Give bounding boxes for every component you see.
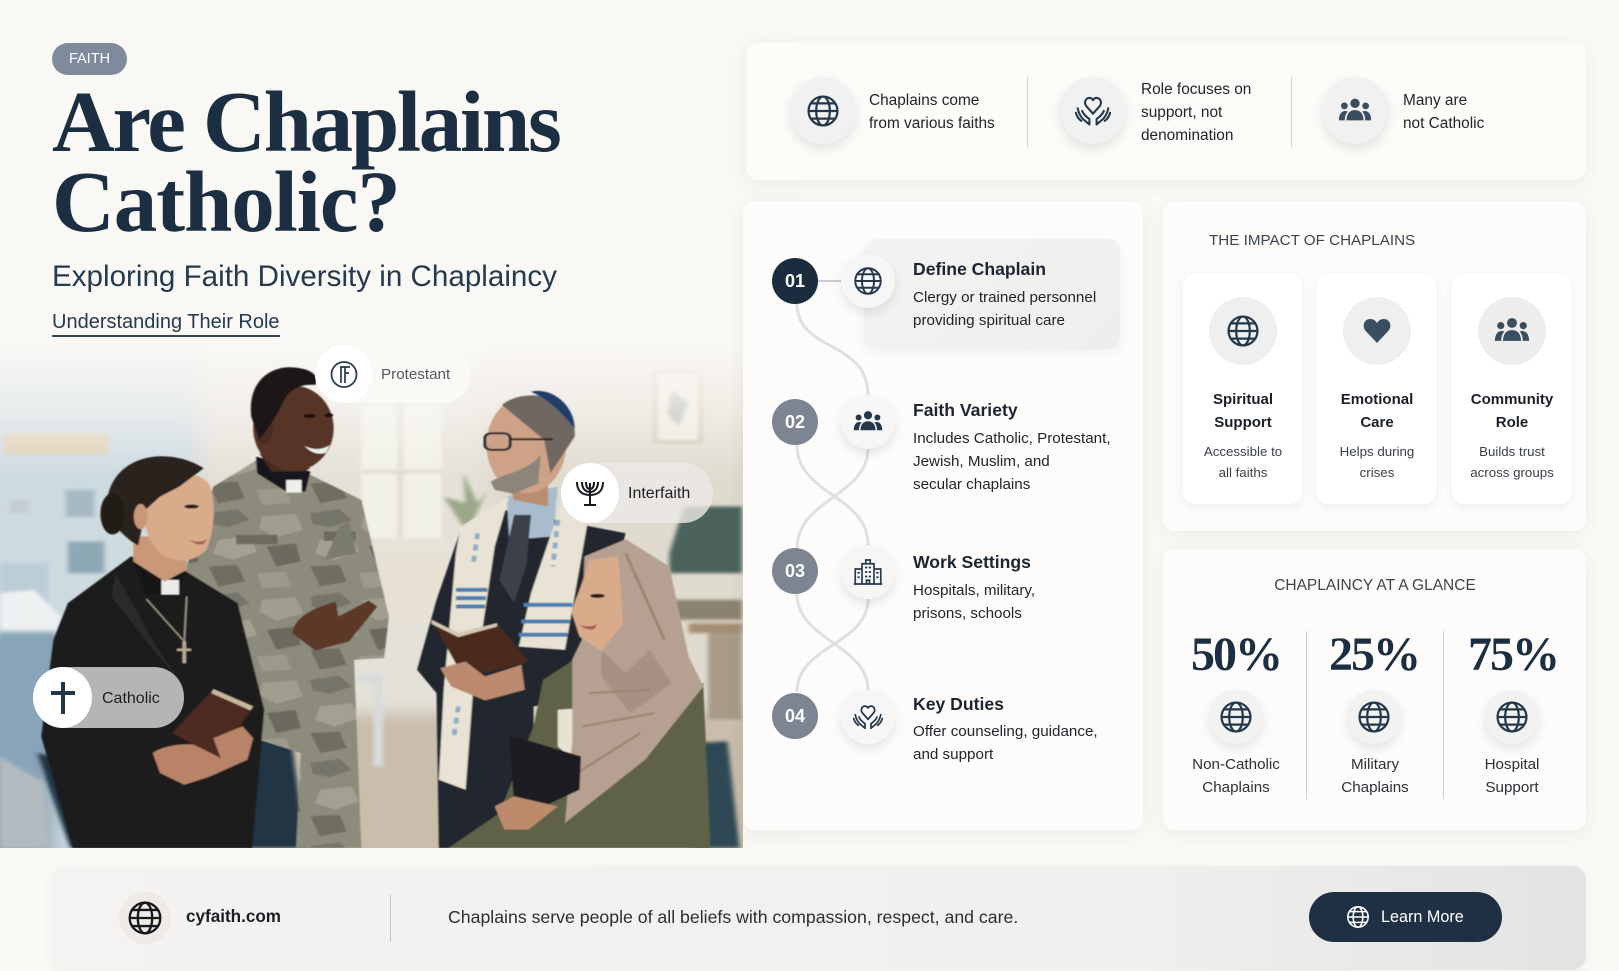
face	[571, 557, 623, 651]
stat: 75%: Hospital	[1485, 756, 1539, 773]
step 04 text: Offer counseling, guidance,	[913, 723, 1098, 740]
stat: 50%: Chaplains	[1202, 778, 1270, 796]
card: emotional care: crises	[1360, 464, 1394, 480]
icon: heart	[1343, 297, 1411, 365]
stat: 25%: Military	[1351, 756, 1399, 773]
hijab	[565, 539, 703, 823]
prayer shawl	[439, 497, 509, 790]
icon: globe	[1209, 690, 1263, 744]
panel: role timeline	[743, 201, 1143, 830]
fact: not catholic: not Catholic	[1403, 115, 1484, 132]
card: community role	[1452, 274, 1571, 504]
icon: globe	[119, 892, 171, 944]
stat: 25%: 25%	[1329, 628, 1419, 681]
rabbi book	[432, 620, 529, 673]
card: spiritual support: Support	[1214, 414, 1272, 430]
stat: 25%	[1329, 628, 1419, 796]
stat: 75%: Support	[1485, 778, 1539, 796]
soldier hands	[292, 600, 377, 650]
website: cyfaith.com	[186, 907, 281, 926]
subtitle: Exploring Faith Diversity in Chaplaincy	[52, 260, 557, 293]
card: community role: across groups	[1470, 464, 1554, 480]
wall shelf and hospital items	[4, 433, 108, 454]
icon: globe	[1347, 690, 1401, 744]
icon: globe	[790, 77, 856, 144]
card: emotional care: Emotional	[1341, 391, 1413, 408]
step 04 icon	[841, 690, 895, 744]
step 04 heading: Key Duties	[913, 694, 1004, 714]
fact: not catholic: Many are	[1403, 92, 1467, 109]
badge: Catholic	[33, 667, 184, 728]
fact: role focus	[1141, 81, 1251, 144]
dark chairs	[36, 736, 306, 848]
badge: Protestant	[315, 345, 464, 403]
title: Are Chaplains	[52, 73, 560, 170]
icon: menorah	[561, 463, 619, 523]
floor and walker	[354, 673, 383, 766]
soldier head	[259, 453, 310, 472]
fact: various faiths: from various faiths	[869, 115, 995, 132]
stat: 25%: Chaplains	[1341, 778, 1409, 796]
badge: Protestant: Protestant	[381, 366, 450, 383]
fact: various faiths: Chaplains come	[869, 92, 979, 109]
icon: protestant seal	[315, 345, 372, 403]
step 01 icon	[841, 254, 895, 308]
step 01 text	[913, 289, 1096, 329]
priest book	[172, 689, 253, 758]
step 04 text	[913, 723, 1098, 763]
icon: globe	[1209, 297, 1277, 365]
step 03 text: prisons, schools	[913, 605, 1022, 622]
step 02 text	[913, 430, 1111, 493]
card: community role: Community	[1471, 391, 1553, 408]
step 04 number	[772, 693, 818, 739]
step 03 number	[772, 548, 818, 594]
panel: chaplaincy at a glance	[1163, 549, 1586, 830]
background left column wash	[0, 0, 795, 860]
step 02 icon	[841, 395, 895, 449]
step 03 number: 03	[785, 561, 805, 581]
card: spiritual support: Spiritual	[1213, 391, 1273, 408]
card: emotional care	[1317, 274, 1436, 504]
step 04 text: and support	[913, 746, 993, 763]
fact: not catholic	[1403, 92, 1484, 132]
stat: 75%: 75%	[1468, 628, 1558, 681]
rabbi body	[417, 510, 626, 848]
footer bar	[52, 866, 1586, 970]
step 03 icon	[841, 545, 895, 599]
card: emotional care: Care	[1360, 414, 1394, 430]
plant	[444, 473, 487, 527]
step 01 heading: Define Chaplain	[913, 259, 1046, 279]
step 02 number: 02	[785, 412, 805, 432]
step 03 text: Hospitals, military,	[913, 582, 1035, 599]
closing statement: Chaplains serve people of all beliefs with compassion, respect, and care.	[448, 907, 1018, 927]
fact: various faiths	[869, 92, 995, 132]
black book	[509, 735, 581, 820]
seated woman body	[449, 650, 711, 848]
priest neck and head	[133, 537, 187, 582]
priest hands	[153, 726, 253, 785]
timeline connectors	[796, 280, 870, 692]
highlight card behind step 1	[864, 239, 1120, 349]
fact: role focus: support, not	[1141, 104, 1222, 121]
card: emotional care: Helps during	[1340, 444, 1414, 459]
icon: people	[1478, 297, 1546, 365]
sub-heading: understanding their role: Understanding Their Role	[52, 311, 280, 333]
fact: role focus: denomination	[1141, 127, 1233, 144]
fact: role focus: Role focuses on	[1141, 81, 1251, 98]
card: spiritual support	[1183, 274, 1302, 504]
step 03 heading: Work Settings	[913, 552, 1031, 572]
title	[52, 73, 560, 250]
step 01 number: 01	[785, 271, 805, 291]
header tag: FAITH	[52, 43, 127, 75]
step 04 number: 04	[785, 706, 805, 726]
stat: 50%	[1191, 628, 1281, 796]
step 02 text: secular chaplains	[913, 476, 1030, 493]
icon: cross	[33, 667, 92, 728]
step 01 number	[772, 258, 818, 304]
panel: key facts strip	[746, 43, 1586, 180]
impact heading: THE IMPACT OF CHAPLAINS	[1209, 232, 1415, 249]
icon: globe	[1485, 690, 1539, 744]
right chair and table	[669, 507, 742, 573]
step 02 heading: Faith Variety	[913, 400, 1018, 420]
step 02 text: Includes Catholic, Protestant,	[913, 430, 1111, 447]
stat: 75%	[1468, 628, 1558, 796]
card: community role: Role	[1496, 414, 1528, 430]
step 01 text: providing spiritual care	[913, 312, 1065, 329]
card: spiritual support: all faiths	[1219, 464, 1267, 480]
icon: hands and heart	[1060, 77, 1126, 144]
stat: 50%: Non-Catholic	[1192, 756, 1280, 773]
badge: Catholic: Catholic	[102, 690, 160, 707]
wall picture	[656, 372, 700, 442]
badge: Interfaith	[561, 463, 713, 523]
badge: Interfaith: Interfaith	[628, 485, 690, 502]
button: learn more	[1309, 892, 1502, 942]
icon: people	[1322, 77, 1388, 144]
window	[361, 405, 441, 538]
title: Catholic?	[52, 153, 400, 250]
illustration: four chaplains of different faiths in a hospital room	[0, 366, 743, 848]
panel: the impact of chaplains	[1163, 201, 1586, 531]
stat: 50%: 50%	[1191, 628, 1281, 681]
button: learn more: Learn More	[1381, 908, 1464, 926]
card: community role: Builds trust	[1479, 444, 1545, 459]
rabbi hands	[440, 661, 525, 700]
step 02 text: Jewish, Muslim, and	[913, 453, 1050, 470]
soldier body	[184, 460, 389, 848]
priest woman body	[41, 557, 264, 848]
rabbi neck and head	[504, 473, 548, 507]
card: spiritual support: Accessible to	[1204, 444, 1282, 459]
glance heading: CHAPLAINCY AT A GLANCE	[1274, 577, 1476, 594]
hands	[495, 796, 558, 830]
step 02 number	[772, 399, 818, 445]
step 03 text	[913, 582, 1035, 622]
step 01 text: Clergy or trained personnel	[913, 289, 1096, 306]
icon: globe	[1347, 906, 1369, 928]
header tag: FAITH: FAITH	[69, 51, 110, 67]
